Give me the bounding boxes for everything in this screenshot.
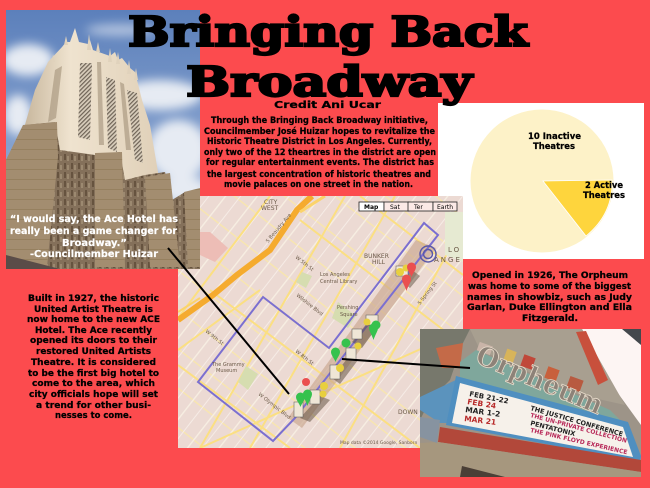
map: target icon [420,246,436,262]
panel: Orpheum caption: names in showbiz, such as Judy [467,293,632,303]
panel: United Artists Theatre text: to be the first big hotel to [28,369,159,379]
photo: red vertical sign [576,331,608,385]
map: street labels: Museum [216,368,237,374]
photo: marquee board: THE PINK FLOYD EXPERIENCE [530,427,628,456]
panel: pie chart [438,103,644,259]
map: street labels: WEST [261,205,279,212]
intro text block: Historic Theatre District in Los Angeles. Currently, [207,137,432,147]
map: street labels: LO [448,246,461,254]
photo: carved lower tower [6,122,200,269]
map of the Broadway theatre district [178,196,463,448]
panel: United Artists Theatre text: nesses to come. [55,411,132,421]
map: street labels: S Beaudry Ave [265,213,293,244]
panel: United Artists Theatre text: now home to the new ACE [27,315,160,325]
intro text block: Through the Bringing Back Broadway initiative, [211,116,428,126]
map: street labels: Pershing [337,305,358,311]
quote from Councilmember Huizar: really been a game changer for [10,226,177,237]
photo: Orpheum Theatre marquee [420,329,641,477]
photo: marquee board: PENTATONIX [530,419,576,438]
quote from Councilmember Huizar [10,214,178,260]
map: type control buttons [359,202,457,211]
panel: United Artists Theatre text: city officials hope will set [29,390,159,400]
map: street labels: W 5th St [294,255,314,273]
map: street labels: Square [340,312,358,318]
photo: teal sign band [460,350,625,425]
pie label: active: Theatres [583,191,625,201]
map: street labels: The Grammy [211,362,245,368]
photo: Ace Hotel tower [2,10,209,269]
photo: bright sky [582,329,641,425]
pie label: active [583,181,625,201]
map: type control buttons: Sat [390,204,400,211]
map: purple district outline [198,223,438,441]
arrow: tower to Ace Hotel on map [168,248,289,394]
panel: United Artists Theatre text: Theatre. It is considered [31,358,156,368]
photo: cream upper tower [22,28,160,190]
map: street labels: HILL [372,259,386,266]
map: street labels: BUNKER [364,253,389,260]
panel: Orpheum caption: Opened in 1926, The Orpheum [472,271,628,281]
photo: clouds [2,24,209,204]
photo: stone pillars [6,122,200,267]
map: Broadway corridor band [288,240,436,428]
photo: marquee board: THE JUSTICE CONFERENCE [529,404,624,438]
photo: shaded buttresses [48,62,131,150]
panel: United Artists Theatre text: Built in 1927, the historic [28,294,159,304]
photo: marquee board: FEB 24 [467,397,497,411]
pie: 10 inactive theatres [470,110,614,252]
map: red pins [302,262,416,386]
pie label: inactive: Theatres [533,142,575,152]
quote from Councilmember Huizar: Broadway.” [62,238,127,249]
photo: dark entrance [460,466,505,477]
map: street labels: W 8th St [294,349,314,367]
photo: marquee board: FEB 21-22 [469,390,509,406]
map: green pins [296,320,380,407]
photo: red ornamental band [438,427,641,472]
map: pale blocks [200,212,463,390]
photo: marquee board: MAR 21 [464,414,497,427]
panel: Orpheum caption [463,259,644,329]
map: street labels: W 9th St [204,329,224,347]
map: street labels: S Spring St [417,281,439,306]
photo: street shadow [6,255,60,269]
map: street labels: Central Library [320,279,357,285]
map: type control buttons: Map [364,204,379,211]
panel: Orpheum caption: was home to some of the biggest [468,282,632,292]
map: street labels: DOWN [398,409,418,416]
photo: coloured letter backings [477,342,584,392]
map: freeway [178,196,325,320]
photo: tower lattice windows [78,63,143,163]
intro text block: for regular entertainment events. The district has [206,158,434,168]
title: Broadway [186,58,473,106]
photo: building facade [470,329,625,405]
photo: marquee board [452,383,633,457]
panel: United Artists Theatre text: United Artist Theatre is [34,305,153,315]
pie: 2 active theatres [543,180,612,236]
photo: marquee blue frame [446,376,641,462]
photo: marquee board: THE UN-PRIVATE COLLECTION [529,412,628,445]
pie label: inactive [528,132,581,152]
intro text block: only two of the 12 theartres in the district are open [204,148,436,158]
photo: marquee board: MAR 1-2 [465,405,501,419]
panel: United Artists Theatre text: a trend for other busi- [36,401,151,411]
map: street labels: ANGE [434,256,462,264]
map: street labels: Map data ©2014 Google, Sanborn [340,439,417,446]
map: major yellow streets [178,196,463,448]
intro text block: Councilmember José Huizar hopes to revitalize the [204,126,435,137]
panel: Orpheum caption: Fitzgerald. [522,314,578,324]
map: street labels: Wilshire Blvd [295,293,324,317]
map: type control buttons: Earth [437,204,453,211]
photo: soffit [420,442,641,477]
intro text block: movie palaces on one street in the nation. [224,180,413,190]
photo: corner building shade [622,329,641,345]
intro text block [204,116,436,190]
panel: United Artists Theatre text [27,294,160,421]
quote from Councilmember Huizar: “I would say, the Ace Hotel has [10,214,178,225]
photo: blue column [420,380,456,423]
map: street labels: Los Angeles [320,272,350,278]
pie label: active: 2 Active [585,181,623,191]
map: street labels: CITY [264,199,278,206]
panel: United Artists Theatre text: Hotel. The Ace recently [35,326,152,336]
quote from Councilmember Huizar: -Councilmember Huizar [30,249,158,260]
photo: spires [52,34,138,80]
photo: left ornament [420,329,470,420]
panel: United Artists Theatre text: opened its doors to their [30,336,158,346]
arrow: Orpheum photo to map [342,359,470,368]
photo credit: Credit Ani Ucar [274,100,381,111]
map: street labels [204,199,462,446]
map: theatre icons [294,264,420,422]
photo: Orpheum neon sign lettering: Orpheum [471,340,608,421]
map: type control buttons: Ter [413,204,423,211]
pie label: inactive: 10 Inactive [528,132,581,142]
photo: left bottom ornament [420,417,440,443]
panel: Orpheum caption: Garlan, Duke Ellington and Ella [467,303,632,313]
intro text block: the largest concentration of historic theatres and [207,170,431,180]
panel: United Artists Theatre text: come to the area, which [32,379,155,389]
map: street labels: W Olympic Blvd [257,392,292,421]
panel: United Artists Theatre text: restored United Artists [36,347,151,357]
title: Bringing Back [128,8,530,56]
title [128,8,530,106]
